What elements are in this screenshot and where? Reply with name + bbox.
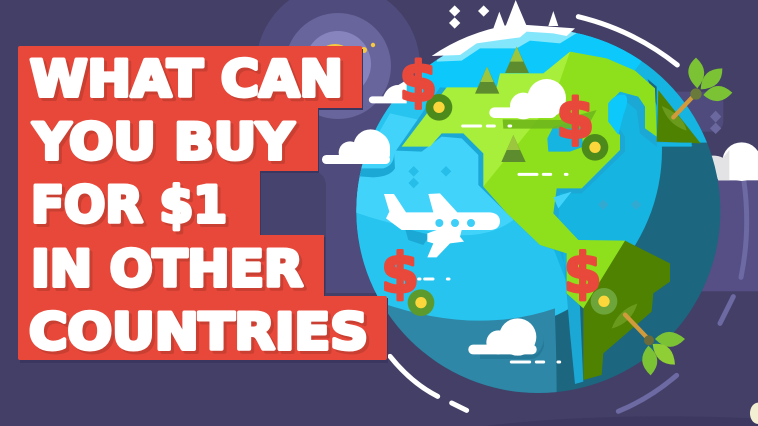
east coast triangle — [657, 90, 701, 143]
ocean diamonds — [408, 166, 451, 188]
right cloud — [709, 142, 758, 181]
lit ocean — [356, 32, 662, 316]
title text — [29, 50, 368, 361]
sun with halo rings — [256, 0, 420, 148]
top palm tree — [662, 58, 732, 131]
background block behind title — [255, 100, 400, 293]
trees — [475, 47, 529, 162]
right background panel — [618, 92, 758, 411]
white orbit arc top — [578, 17, 677, 65]
bottom background shade — [483, 416, 758, 426]
coins — [408, 94, 617, 316]
title text shadow: IN OTHER — [34, 243, 306, 301]
panel shadow — [20, 49, 388, 363]
land shadow — [396, 87, 693, 384]
south america tint — [553, 192, 572, 208]
title text shadow — [32, 53, 371, 364]
title text shadow: COUNTRIES — [32, 306, 371, 364]
bottom palm tree — [612, 304, 685, 375]
south america dark side — [583, 241, 670, 380]
dollar signs: $ — [564, 242, 601, 305]
north america right — [483, 52, 657, 308]
globe — [356, 32, 720, 393]
white orbit arc bottom — [390, 356, 467, 410]
title text shadow: WHAT CAN — [33, 53, 346, 111]
cloud top left — [369, 80, 407, 103]
title text shadow: FOR $1 — [34, 179, 230, 237]
title text: IN OTHER — [31, 240, 303, 298]
egg at corner — [750, 403, 758, 424]
pale ocean band — [340, 113, 513, 235]
title text: COUNTRIES — [29, 303, 368, 361]
bay — [608, 95, 627, 135]
ice cap fringe — [436, 32, 576, 62]
dollar signs: $ — [400, 51, 437, 114]
cloud left — [322, 129, 390, 164]
shaded ocean crescent — [388, 305, 557, 393]
title text: YOU BUY — [32, 113, 295, 171]
title text: WHAT CAN — [30, 50, 343, 108]
airplane — [384, 193, 500, 257]
north america left — [402, 52, 570, 187]
title text shadow: YOU BUY — [35, 116, 298, 174]
panel body — [18, 46, 387, 360]
dollar signs: $ — [557, 87, 594, 150]
title text: FOR $1 — [31, 176, 227, 234]
ice cap — [432, 24, 575, 56]
cloud shadows — [360, 154, 395, 178]
dollar signs: $ — [381, 242, 419, 305]
motion dashes — [419, 126, 567, 362]
cloud bottom — [468, 318, 537, 356]
cloud center — [489, 79, 566, 119]
inland lake — [547, 120, 583, 152]
sparkle diamonds — [449, 5, 489, 29]
title panel — [18, 46, 388, 364]
dollar signs — [381, 51, 601, 305]
mountain peaks — [493, 0, 558, 28]
